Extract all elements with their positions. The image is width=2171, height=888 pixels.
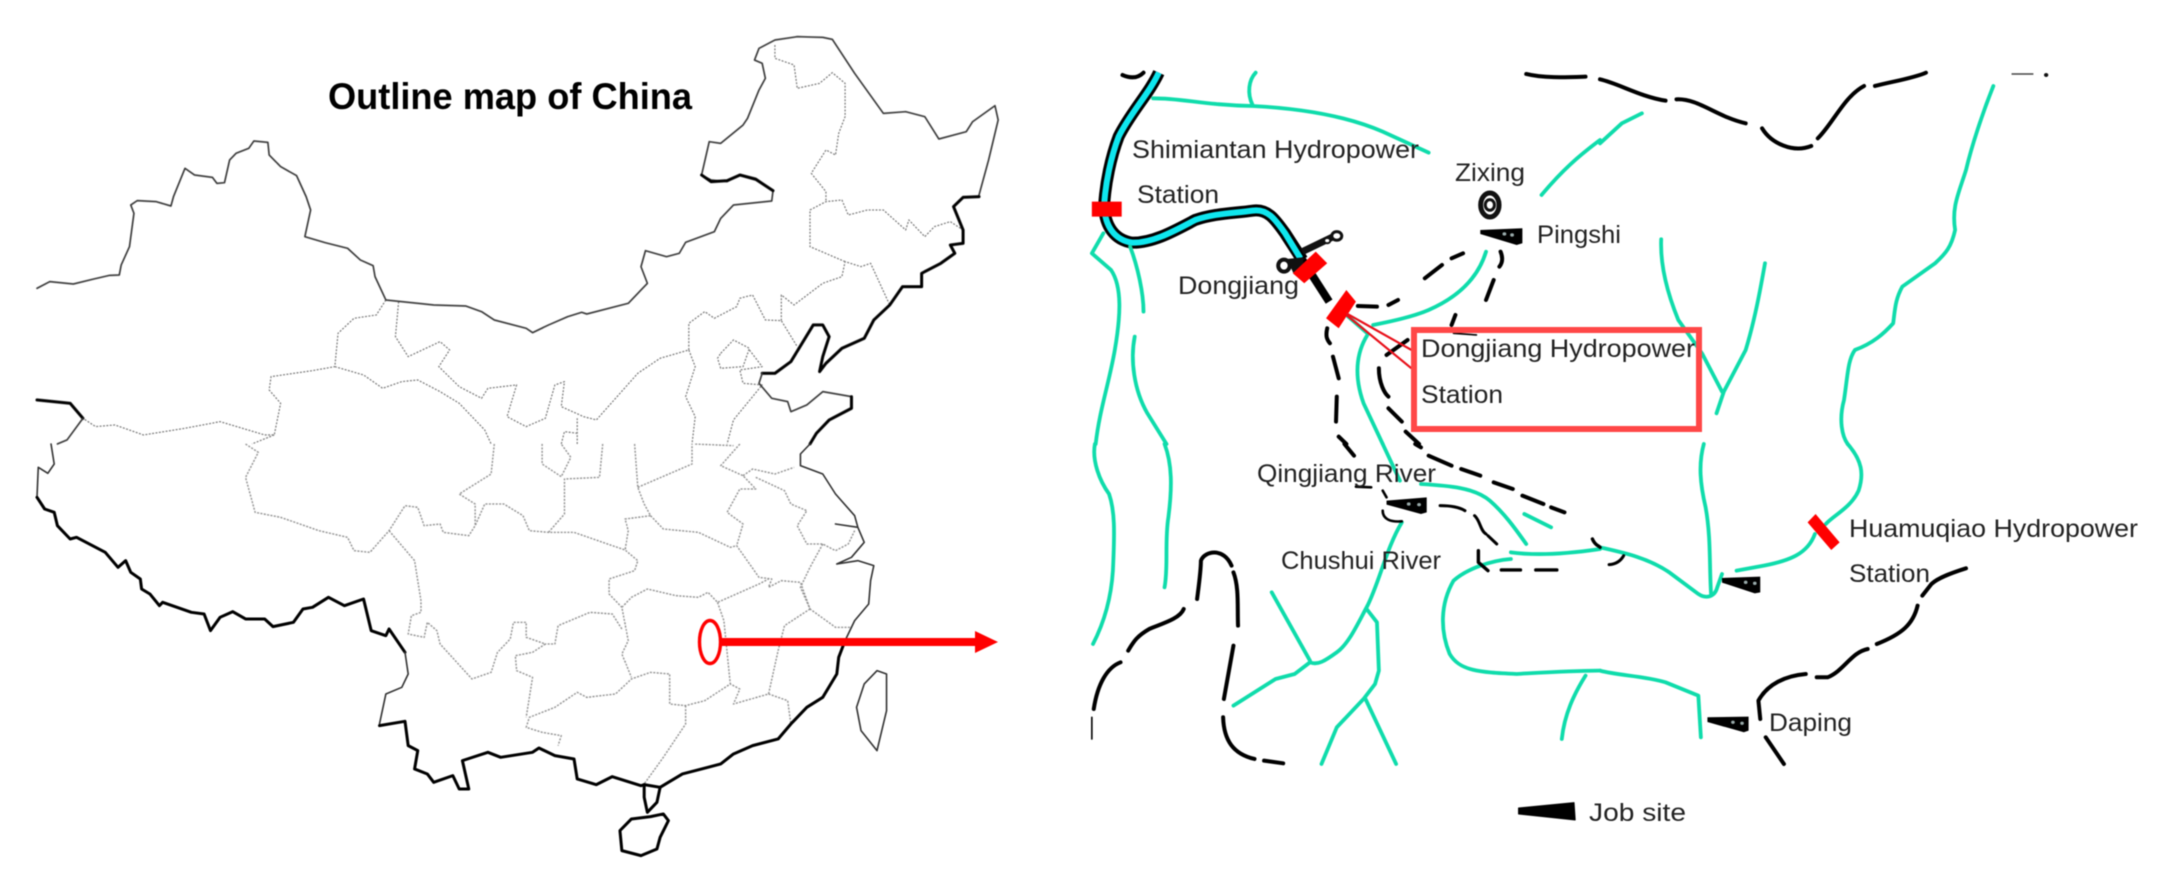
legend: job site: [1519, 799, 1686, 827]
label: Huamuqiao Hydropower Station: [1849, 515, 2138, 588]
label: Huamuqiao Hydropower Station: Huamuqiao Hydropower: [1849, 515, 2138, 543]
label: Daping: Daping: [1769, 709, 1852, 737]
label: Dongjiang Hydropower Station: Station: [1421, 381, 1503, 409]
label: Qingjiang River: Qingjiang River: [1257, 460, 1436, 488]
label: Shimiantan Hydropower Station: Station: [1137, 181, 1219, 209]
label: Dongjiang Hydropower Station: Dongjiang Hydropower: [1421, 335, 1695, 363]
island: Hainan: [620, 814, 668, 856]
job site icon: Pingshi: [1480, 228, 1522, 245]
panel: outline map of China: [37, 37, 998, 856]
label: Shimiantan Hydropower Station: Shimiantan Hydropower: [1132, 136, 1419, 164]
hydropower station markers: [1092, 202, 1840, 550]
callout pointer: [1346, 313, 1411, 368]
island: Taiwan: [857, 671, 887, 751]
arrow to site map: [721, 631, 998, 653]
label: Zixing: Zixing: [1455, 159, 1525, 187]
provincial boundaries: [83, 45, 963, 784]
label: Dongjiang: Dongjiang: [1178, 272, 1299, 300]
label: Dongjiang Hydropower Station: [1421, 335, 1695, 409]
icon: Dongjiang town marker: [1278, 232, 1342, 272]
label: Pingshi: Pingshi: [1537, 221, 1621, 249]
title: Outline map of China: [328, 76, 692, 117]
national border and coastline: [37, 37, 998, 812]
panel: site map: [1092, 73, 2138, 827]
callout box: Dongjiang Hydropower Station: [1414, 330, 1699, 429]
job site icon: central: [1722, 577, 1760, 593]
study area ellipse: [700, 620, 720, 664]
label: Chushui River: Chushui River: [1281, 547, 1441, 575]
job site icon: Daping: [1707, 717, 1749, 732]
job site icon: Qingjiang: [1387, 497, 1427, 514]
label: Shimiantan Hydropower Station: [1132, 136, 1419, 209]
legend: job site: Job site: [1589, 799, 1686, 827]
main river: Shimiantan to Dongjiang: [1104, 73, 1329, 302]
dashed black roads: [1092, 73, 2048, 764]
label: Huamuqiao Hydropower Station: Station: [1849, 560, 1930, 588]
icon: Zixing town marker: [1481, 193, 1499, 217]
tributary rivers: [1092, 73, 1993, 764]
